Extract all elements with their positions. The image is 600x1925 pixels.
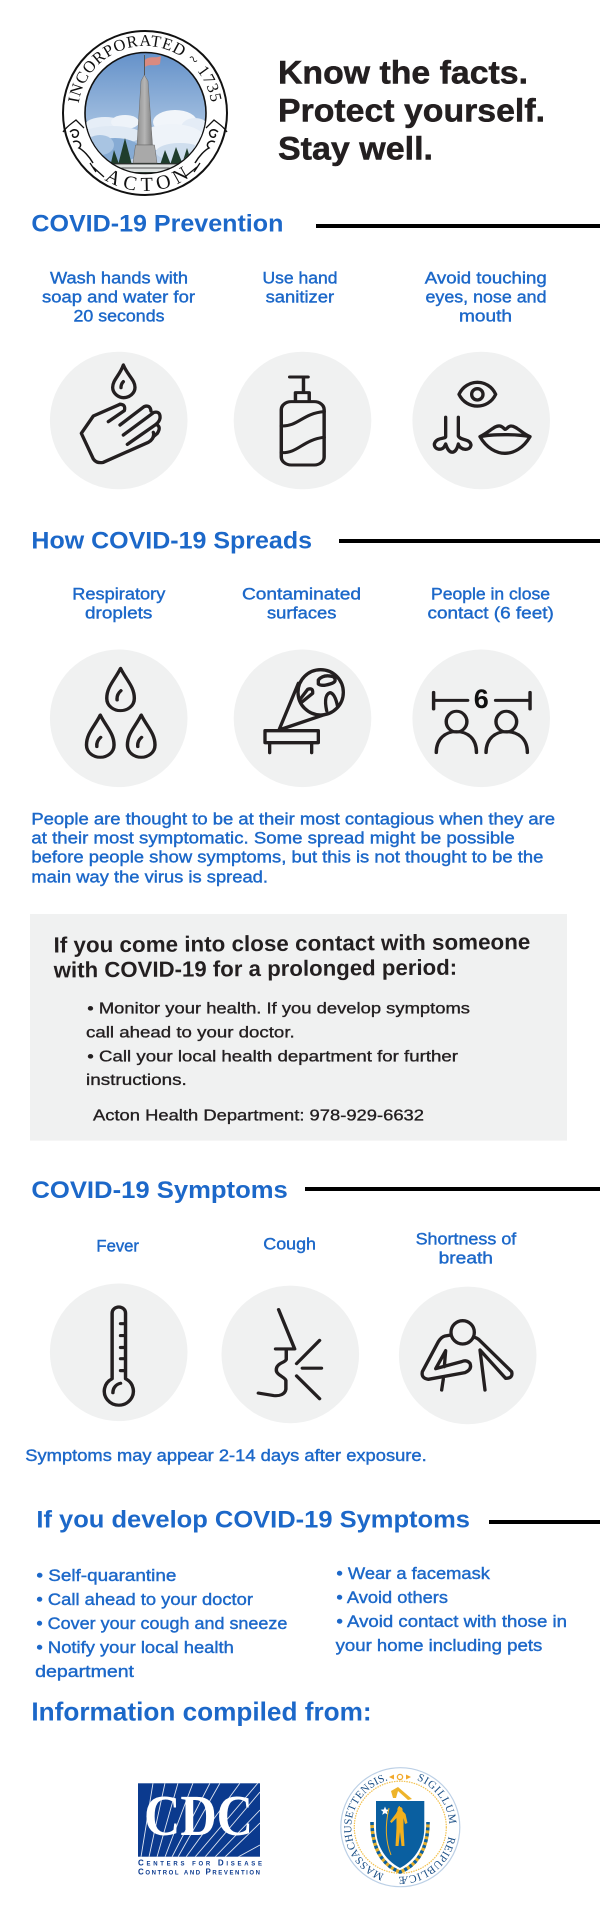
panel bullet list — [86, 1000, 470, 1089]
label: respiratory droplets — [72, 585, 166, 622]
panel heading — [52, 929, 531, 983]
title — [278, 54, 545, 166]
label: wash hands: Wash hands with — [50, 269, 188, 287]
paragraph: contagiousness: at their most symptomatic. Some spread might be possible — [31, 829, 515, 847]
list: actions left: • Self-quarantine — [36, 1567, 176, 1585]
panel bullet list: instructions. — [86, 1072, 187, 1089]
paragraph: contagiousness: People are thought to be at their most contagious when they are — [31, 810, 555, 828]
logo: CDC — [138, 1783, 262, 1876]
icon: thermometer — [50, 1284, 188, 1421]
heading: COVID-19 Symptoms: COVID-19 Symptoms — [31, 1177, 288, 1204]
label: wash hands: soap and water for — [42, 288, 196, 306]
panel: close contact advice — [30, 914, 567, 1141]
icon: eye nose mouth — [412, 352, 550, 489]
label: close contact: contact (6 feet) — [428, 604, 554, 622]
logo: Massachusetts state seal: SIGILLUM — [418, 1774, 456, 1824]
list: actions right: • Avoid contact with those in — [336, 1613, 567, 1631]
paragraph: contagiousness: main way the virus is spread. — [31, 868, 268, 886]
list: actions left: • Cover your cough and sneeze — [36, 1615, 287, 1633]
label: avoid touching: eyes, nose and — [426, 288, 546, 306]
town of Acton seal — [62, 30, 228, 196]
label: respiratory droplets: droplets — [85, 604, 152, 622]
label: cough: Cough — [263, 1235, 316, 1253]
list: actions left: department — [35, 1663, 134, 1681]
label: fever: Fever — [96, 1238, 139, 1256]
label: shortness of breath: Shortness of — [416, 1230, 517, 1248]
list: actions right: your home including pets — [336, 1637, 542, 1655]
title: Protect yourself. — [278, 92, 545, 128]
heading: How COVID-19 Spreads — [31, 527, 600, 554]
label: avoid touching — [425, 269, 547, 325]
icon: sanitizer bottle — [234, 352, 371, 489]
label: close contact — [428, 585, 554, 622]
panel bullet list: • Call your local health department for further — [87, 1048, 459, 1065]
paragraph: contagiousness: before people show symptoms, but this is not thought to be the — [31, 848, 543, 866]
label: close contact: People in close — [431, 585, 550, 603]
icon: globe on surface — [234, 650, 371, 787]
heading: COVID-19 Prevention: COVID-19 Prevention — [31, 211, 283, 238]
label: hand sanitizer — [262, 269, 338, 306]
note: symptom onset: Symptoms may appear 2-14 days after exposure. — [25, 1447, 427, 1465]
label: wash hands — [42, 269, 196, 325]
icon: six feet distance — [412, 650, 550, 787]
town of Acton seal: ACTON — [104, 166, 188, 191]
list: actions left — [35, 1567, 287, 1681]
title: Stay well. — [278, 130, 433, 166]
label: hand sanitizer: sanitizer — [266, 288, 335, 306]
logo: Massachusetts state seal — [340, 1767, 460, 1888]
label: contaminated surfaces: Contaminated — [242, 585, 361, 603]
panel bullet list: • Monitor your health. If you develop symptoms — [87, 1000, 470, 1017]
heading: COVID-19 Prevention — [31, 211, 600, 238]
label: respiratory droplets: Respiratory — [72, 585, 166, 603]
label: shortness of breath: breath — [439, 1249, 493, 1267]
logo: CDC: Centers for Disease — [138, 1858, 262, 1868]
title: Know the facts. — [278, 54, 528, 90]
label: contaminated surfaces — [242, 585, 361, 622]
logo: Massachusetts state seal: MASSACHUSETTENSIS. — [344, 1774, 388, 1881]
icon: droplets — [50, 650, 188, 787]
list: actions right: • Wear a facemask — [336, 1565, 491, 1583]
heading: COVID-19 Symptoms — [31, 1177, 600, 1204]
phone number: Acton Health Department: 978-929-6632 — [93, 1107, 424, 1124]
list: actions left: • Call ahead to your doctor — [36, 1591, 254, 1609]
heading: How COVID-19 Spreads: How COVID-19 Spreads — [31, 527, 312, 554]
label: contaminated surfaces: surfaces — [267, 604, 336, 622]
panel heading: If you come into close contact with someone — [53, 929, 530, 957]
icon: shortness of breath — [399, 1287, 536, 1424]
icon: six feet distance: 6 — [474, 684, 489, 714]
town of Acton seal: INCORPORATED ~ 1735 — [68, 35, 222, 103]
label: shortness of breath — [416, 1230, 517, 1267]
paragraph: contagiousness — [31, 810, 555, 886]
logo: CDC: CDC — [144, 1783, 253, 1848]
label: hand sanitizer: Use hand — [262, 269, 338, 287]
icon: hand wash — [50, 352, 188, 489]
label: avoid touching: Avoid touching — [425, 269, 547, 287]
panel heading: with COVID-19 for a prolonged period: — [53, 955, 457, 983]
list: actions left: • Notify your local health — [36, 1639, 234, 1657]
logo: Massachusetts state seal: REIPUBLICÆ — [399, 1836, 456, 1884]
icon: cough — [221, 1286, 359, 1423]
list: actions right: • Avoid others — [336, 1589, 448, 1607]
heading: If you develop COVID-19 Symptoms: If you develop COVID-19 Symptoms — [36, 1506, 470, 1533]
logo: CDC: Control and Prevention — [138, 1867, 260, 1876]
label: avoid touching: mouth — [459, 307, 512, 325]
list: actions right — [336, 1565, 567, 1655]
label: wash hands: 20 seconds — [74, 307, 164, 325]
panel bullet list: call ahead to your doctor. — [86, 1024, 295, 1042]
heading: information sources: Information compiled from: — [31, 1697, 372, 1727]
